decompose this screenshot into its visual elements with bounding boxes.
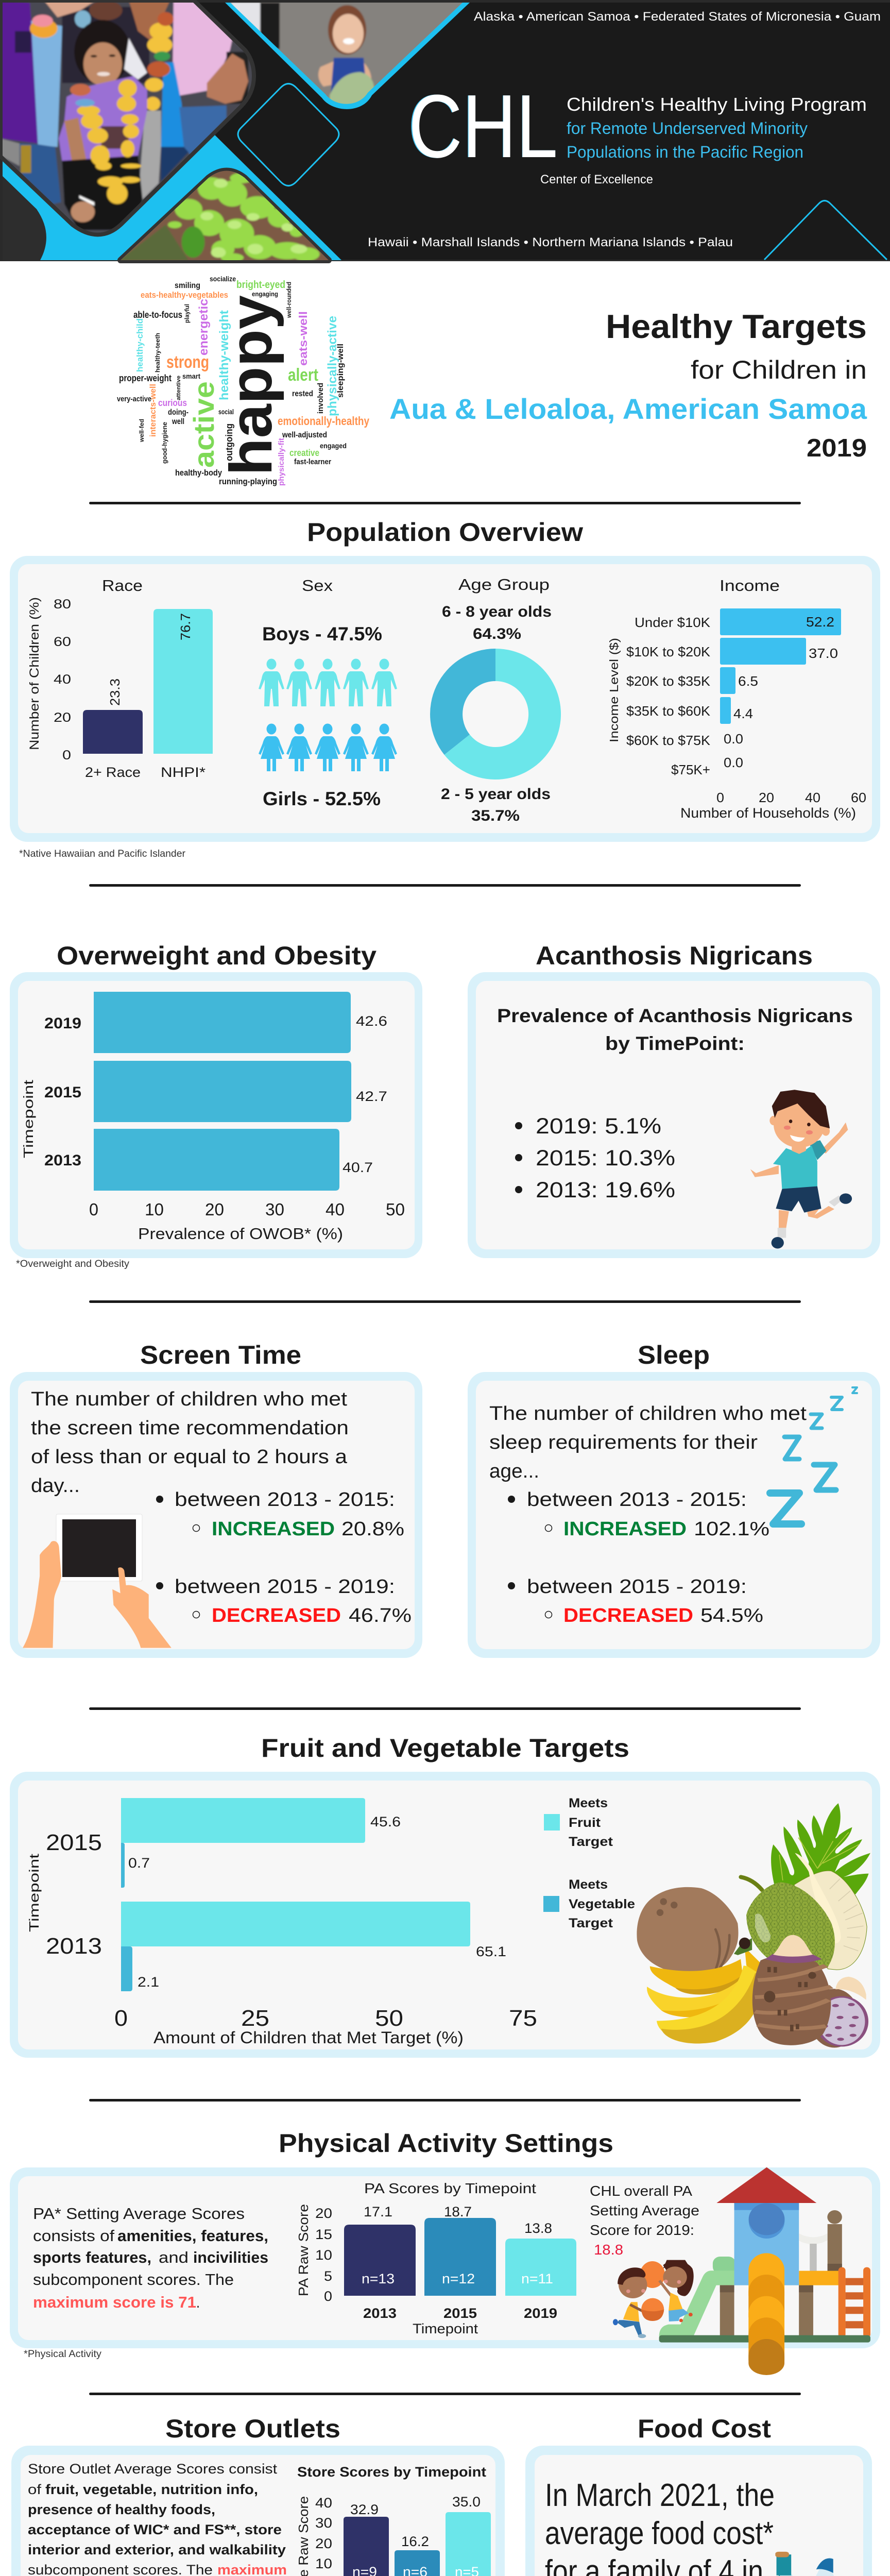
- callout: CHL overall PA score: Score for 2019:: [590, 2222, 694, 2238]
- word cloud: socialize: [210, 275, 236, 283]
- icon: running boy: [750, 1090, 852, 1248]
- heading: physical activity settings: Physical Activity Settings: [279, 2129, 613, 2158]
- chart: income: 20: [759, 790, 774, 805]
- store description text: [28, 2461, 287, 2576]
- bar chart: OWOB prevalence: 10: [145, 1200, 164, 1219]
- bar chart: fruit and vegetable: 25: [241, 2006, 269, 2031]
- bar chart: OWOB prevalence: 2019: [44, 1015, 81, 1032]
- chart: income: $75K+: [671, 762, 710, 777]
- PA description text: subcomponent scores. The: [33, 2270, 234, 2289]
- PA description text: [33, 2205, 268, 2311]
- sleep intro text: [489, 1403, 807, 1482]
- bar chart: PA scores by timepoint: 2013: [363, 2306, 397, 2321]
- legend: Meets: [569, 1796, 608, 1810]
- panel: food cost: [525, 2446, 883, 2576]
- word cloud: rested: [292, 389, 313, 398]
- bar chart: PA scores by timepoint: n=13: [362, 2271, 395, 2286]
- bar chart: OWOB prevalence: 2015: [44, 1084, 81, 1101]
- program name: Populations in the Pacific Region: [567, 143, 803, 161]
- PA description text: incivilities: [193, 2248, 268, 2266]
- panel: fruit and vegetable targets: [10, 1772, 880, 2058]
- chart: income: Income Level ($): [607, 638, 621, 742]
- chart: race: NHPI*: [161, 765, 206, 780]
- bar chart: store scores by timepoint: 32.9: [350, 2502, 379, 2517]
- heading: store outlets: Store Outlets: [165, 2414, 340, 2443]
- word cloud: well-rounded: [285, 282, 293, 318]
- bar chart: OWOB prevalence: 20: [205, 1200, 224, 1219]
- chart: race: Race: [102, 577, 143, 595]
- chart: income: Number of Households (%): [680, 805, 856, 821]
- bar chart: PA scores by timepoint: PA Scores by Timepoint: [364, 2180, 536, 2196]
- icon: hands holding tablet: [23, 1514, 172, 1648]
- sleep change list: [508, 1489, 769, 1626]
- panel: acanthosis nigricans: [468, 972, 880, 1258]
- heading: fruit and vegetable targets: Fruit and Vegetable Targets: [261, 1734, 629, 1762]
- legend: Target: [569, 1916, 613, 1930]
- chart: race: 80: [54, 597, 71, 612]
- bar chart: store scores by timepoint: 10: [315, 2556, 332, 2571]
- chart: race: 76.7: [178, 613, 193, 640]
- heading: sleep: Sleep: [638, 1341, 710, 1369]
- program name: [540, 94, 867, 187]
- footnote: NHPI: *Native Hawaiian and Pacific Islander: [19, 849, 186, 859]
- bar chart: fruit and vegetable: 75: [509, 2006, 537, 2031]
- word cloud: [117, 275, 369, 486]
- bar chart: OWOB prevalence: 40.7: [343, 1160, 373, 1175]
- sleep intro text: sleep requirements for their: [489, 1432, 758, 1453]
- legend: Target: [569, 1835, 613, 1849]
- word cloud: good-hygiene: [161, 422, 168, 464]
- chart: age group: [430, 575, 561, 824]
- word cloud: creative: [289, 448, 319, 458]
- sleep change list: DECREASED: [563, 1605, 693, 1626]
- territories bottom line: Hawaii • Marshall Islands • Northern Mariana Islands • Palau: [368, 235, 733, 249]
- bar chart: store scores by timepoint: 35.0: [452, 2494, 481, 2510]
- chart: sex: Boys - 47.5%: [262, 623, 382, 645]
- chart: race: 0: [62, 748, 71, 762]
- word cloud: physically-active: [326, 316, 339, 416]
- heading: overweight and obesity: Overweight and Obesity: [57, 941, 376, 970]
- program name: Children's Healthy Living Program: [567, 94, 867, 115]
- icon: tropical foods: [637, 1803, 870, 2047]
- main title: Healthy Targets: [606, 308, 867, 345]
- bar chart: PA scores by timepoint: 2015: [443, 2306, 477, 2321]
- word cloud: bright-eyed: [236, 279, 285, 291]
- word cloud: emotionally-healthy: [278, 414, 369, 428]
- heading: acanthosis nigricans: Acanthosis Nigricans: [536, 941, 813, 970]
- cyan shape behind photos: [3, 135, 341, 260]
- chart: age group: 2 - 5 year olds: [441, 786, 551, 803]
- sleep change list: INCREASED: [563, 1518, 687, 1540]
- main title: [389, 308, 867, 462]
- photo: girl with leis: [0, 0, 258, 242]
- chart: income: 60: [851, 790, 866, 805]
- word cloud: energetic: [197, 299, 211, 355]
- chart: income: $20K to $35K: [626, 673, 711, 689]
- food cost text: In March 2021, the: [545, 2478, 775, 2513]
- word cloud: proper-weight: [119, 373, 172, 383]
- acanthosis list: 2015: 10.3%: [536, 1146, 675, 1171]
- bar chart: fruit and vegetable: Amount of Children that Met Target (%): [153, 2028, 464, 2047]
- screen time intro text: [31, 1388, 349, 1497]
- bar chart: fruit and vegetable: 2015: [46, 1830, 102, 1855]
- PA description text: sports features,: [33, 2248, 151, 2266]
- chart: income: Under $10K: [635, 615, 711, 630]
- sleep intro text: The number of children who met: [489, 1403, 807, 1425]
- heading: screen time: Screen Time: [140, 1341, 301, 1369]
- acanthosis list: 2013: 19.6%: [536, 1178, 675, 1202]
- bar chart: store scores by timepoint: 16.2: [401, 2534, 429, 2549]
- chart: sex: Girls - 52.5%: [263, 788, 381, 809]
- heading: food cost: Food Cost: [638, 2414, 771, 2443]
- store description text: acceptance of WIC* and FS**, store: [28, 2522, 282, 2537]
- chart: race: 60: [54, 635, 71, 649]
- program name: for Remote Underserved Minority: [567, 119, 808, 138]
- food cost text: [544, 2478, 775, 2576]
- bar chart: PA scores by timepoint: 2019: [524, 2306, 557, 2321]
- chart: age group: 64.3%: [473, 625, 521, 642]
- chart: race: 2+ Race: [85, 765, 141, 780]
- word cloud: smart: [182, 372, 200, 380]
- word cloud: able-to-focus: [133, 310, 182, 320]
- bar chart: fruit and vegetable: 2013: [46, 1934, 102, 1959]
- bar chart: store scores by timepoint: 40: [315, 2495, 332, 2511]
- chart: income: 0: [716, 790, 724, 805]
- legend: Fruit: [569, 1816, 601, 1830]
- word cloud: smiling: [175, 281, 200, 290]
- panel: sleep: [468, 1372, 880, 1658]
- bar chart: store scores by timepoint: 20: [315, 2536, 332, 2551]
- word cloud: attentive: [176, 376, 182, 400]
- program name: Center of Excellence: [540, 173, 653, 187]
- bar chart: PA scores by timepoint: 13.8: [524, 2221, 552, 2236]
- word cloud: engaged: [320, 442, 347, 450]
- bar chart: OWOB prevalence: 42.7: [356, 1089, 387, 1104]
- chart: income: 0.0: [724, 755, 743, 770]
- word cloud: playful: [183, 304, 191, 323]
- word cloud: strong: [166, 352, 209, 372]
- bar chart: fruit and vegetable: 0: [114, 2006, 128, 2031]
- chart: income: Income: [720, 577, 780, 595]
- decorative diamond outline: [238, 83, 339, 185]
- panel: population overview: [10, 556, 880, 842]
- bar chart: store scores by timepoint: 30: [315, 2515, 332, 2531]
- bar chart: OWOB prevalence: 42.6: [356, 1013, 387, 1029]
- store description text: fruit, vegetable, nutrition info,: [45, 2482, 258, 2497]
- chart: race: Number of Children (%): [27, 597, 42, 750]
- chart: income: [607, 577, 866, 821]
- PA description text: and: [159, 2248, 189, 2266]
- chart: race: [27, 577, 213, 780]
- bar chart: PA scores by timepoint: 10: [315, 2247, 332, 2263]
- screen time change list: between 2013 - 2015:: [175, 1489, 395, 1511]
- PA description text: PA* Setting Average Scores: [33, 2205, 245, 2223]
- word cloud: eats-healthy-vegetables: [141, 290, 228, 300]
- word cloud: alert: [288, 365, 318, 385]
- acanthosis heading: [497, 1005, 853, 1054]
- sleep change list: 102.1%: [694, 1518, 769, 1540]
- chart: sex: Sex: [302, 577, 333, 595]
- legend: Vegetable: [569, 1897, 635, 1911]
- chart: income: 4.4: [733, 706, 753, 721]
- word cloud: happy: [217, 295, 284, 476]
- photo: lettuce field: [117, 168, 332, 263]
- chart: race: 20: [54, 710, 71, 725]
- callout: CHL overall PA score: [590, 2183, 699, 2258]
- bar chart: OWOB prevalence: Timepoint: [21, 1079, 36, 1158]
- bar chart: OWOB prevalence: 40: [326, 1200, 345, 1219]
- word cloud: active: [187, 381, 220, 468]
- photo: toddler holding bag of greens: [225, 0, 470, 113]
- callout: CHL overall PA score: Setting Average: [590, 2202, 699, 2218]
- screen time change list: between 2015 - 2019:: [175, 1576, 395, 1598]
- panel: physical activity settings: [10, 2167, 880, 2348]
- icon: playground with children: [613, 2167, 870, 2375]
- dark corner blob: [3, 176, 46, 260]
- panel: overweight and obesity: [10, 972, 422, 1258]
- main title: 2019: [807, 434, 867, 462]
- screen time change list: INCREASED: [212, 1518, 335, 1540]
- word cloud: healthy-body: [175, 468, 222, 478]
- screen time intro text: The number of children who met: [31, 1388, 347, 1410]
- chart: age group: Age Group: [458, 575, 550, 594]
- bar chart: fruit and vegetable: 0.7: [128, 1855, 150, 1871]
- screen time change list: 46.7%: [349, 1605, 412, 1626]
- bar chart: fruit and vegetable: 65.1: [476, 1944, 506, 1959]
- word cloud: healthy-weight: [217, 310, 231, 400]
- sleep intro text: age...: [489, 1461, 539, 1482]
- bar chart: OWOB prevalence: 0: [89, 1200, 98, 1219]
- bar chart: PA scores by timepoint: 0: [324, 2289, 332, 2304]
- PA description text: .: [196, 2293, 200, 2311]
- bar chart: OWOB prevalence: Prevalence of OWOB* (%): [138, 1225, 343, 1243]
- word cloud: well-adjusted: [282, 431, 327, 439]
- chart: income: 6.5: [738, 673, 758, 689]
- bar chart: PA scores by timepoint: n=11: [521, 2271, 553, 2286]
- CHL logotype: CHL: [407, 76, 558, 176]
- sleep change list: between 2015 - 2019:: [527, 1576, 747, 1598]
- panel: screen time: [10, 1372, 422, 1658]
- chart: race: 23.3: [107, 679, 123, 706]
- bar chart: PA scores by timepoint: 17.1: [364, 2204, 392, 2219]
- bar chart: PA scores by timepoint: Timepoint: [413, 2321, 478, 2336]
- bar chart: PA scores by timepoint: 18.7: [444, 2204, 472, 2219]
- word cloud: sleeping-well: [336, 344, 345, 398]
- sleep change list: between 2013 - 2015:: [527, 1489, 747, 1511]
- bar chart: fruit and vegetable: 45.6: [370, 1814, 401, 1829]
- word cloud: physically-fit: [277, 438, 286, 486]
- bar chart: PA scores by timepoint: [296, 2180, 576, 2336]
- legend: Meets: [569, 1877, 608, 1892]
- icon: sleeping Z letters: [770, 1387, 857, 1524]
- chart: income: 40: [805, 790, 820, 805]
- bar chart: fruit and vegetable: Timepoint: [26, 1853, 42, 1932]
- screen time intro text: day...: [31, 1475, 80, 1497]
- main title: for Children in: [691, 355, 867, 384]
- bar chart: OWOB prevalence: 30: [265, 1200, 284, 1219]
- bar chart: OWOB prevalence: 50: [386, 1200, 405, 1219]
- chart: income: $35K to $60K: [626, 703, 711, 719]
- chart: race: 40: [54, 672, 71, 687]
- PA description text: maximum score is 71: [33, 2293, 196, 2311]
- bar chart: fruit and vegetable: 50: [375, 2006, 403, 2031]
- food cost text: average food cost*: [545, 2516, 774, 2551]
- panel: store outlets: [11, 2446, 505, 2576]
- word cloud: healthy-child: [135, 318, 145, 372]
- main title: Aua & Leloaloa, American Samoa: [389, 393, 867, 425]
- bar chart: PA scores by timepoint: 20: [315, 2206, 332, 2221]
- word cloud: engaging: [252, 290, 278, 298]
- word cloud: involved: [316, 383, 325, 414]
- heading: population overview: Population Overview: [307, 518, 583, 547]
- word cloud: social: [218, 408, 234, 416]
- acanthosis list: 2019: 5.1%: [536, 1114, 661, 1139]
- chart: age group: 6 - 8 year olds: [442, 603, 552, 620]
- store description text: Store Outlet Average Scores consist: [28, 2461, 278, 2477]
- chart: income: $60K to $75K: [626, 733, 711, 748]
- decorative triangle outline: [764, 201, 887, 260]
- word cloud: doing-: [168, 408, 189, 417]
- store description text: of: [28, 2482, 42, 2497]
- acanthosis heading: Prevalence of Acanthosis Nigricans: [497, 1005, 853, 1026]
- header banner: [0, 0, 890, 268]
- bar chart: PA scores by timepoint: PA Raw Score: [296, 2204, 311, 2296]
- word cloud: eats-well: [297, 311, 310, 366]
- acanthosis list: [515, 1114, 675, 1202]
- word cloud: very-active: [117, 395, 151, 403]
- chart: income: 52.2: [806, 614, 834, 630]
- word cloud: well-fed: [138, 419, 145, 443]
- store description text: presence of healthy foods,: [28, 2502, 215, 2517]
- icon: grocery bag: [741, 2552, 883, 2576]
- screen time change list: DECREASED: [212, 1605, 341, 1626]
- PA description text: consists of: [33, 2227, 114, 2245]
- screen time intro text: of less than or equal to 2 hours a: [31, 1446, 348, 1468]
- bar chart: PA scores by timepoint: 15: [315, 2227, 332, 2242]
- legend: [543, 1796, 635, 1930]
- bar chart: OWOB prevalence: 2013: [44, 1152, 81, 1169]
- word cloud: running-playing: [219, 477, 277, 486]
- store description text: interior and exterior, and walkability: [28, 2542, 286, 2557]
- screen time change list: 20.8%: [341, 1518, 404, 1540]
- word cloud: interacts-well: [149, 384, 158, 437]
- screen time change list: [156, 1489, 412, 1626]
- chart: income: 0.0: [724, 731, 743, 747]
- sleep change list: 54.5%: [700, 1605, 763, 1626]
- PA description text: amenities, features,: [117, 2227, 268, 2245]
- chart: age group: 35.7%: [471, 807, 520, 824]
- bar chart: PA scores by timepoint: n=12: [442, 2271, 475, 2286]
- footnote: physical activity: *Physical Activity: [24, 2349, 102, 2360]
- word cloud: healthy-teeth: [154, 333, 161, 372]
- callout: CHL overall PA score: 18.8: [594, 2242, 623, 2258]
- word cloud: curious: [158, 398, 187, 408]
- bar chart: store scores by timepoint: [296, 2464, 491, 2576]
- chart: income: 37.0: [809, 646, 838, 661]
- bar chart: PA scores by timepoint: 5: [324, 2268, 332, 2284]
- bar chart: OWOB prevalence: [21, 992, 405, 1243]
- chart: income: $10K to $20K: [626, 644, 711, 659]
- word cloud: outgoing: [224, 423, 234, 461]
- bar chart: fruit and vegetable: [26, 1798, 537, 2047]
- word cloud: well: [172, 417, 184, 426]
- footnote: OWOB: *Overweight and Obesity: [16, 1259, 130, 1269]
- word cloud: fast-learner: [294, 457, 331, 466]
- bar chart: fruit and vegetable: 2.1: [138, 1974, 159, 1990]
- bar chart: store scores by timepoint: Store Scores by Timepoint: [297, 2464, 486, 2480]
- chart: sex: [259, 577, 397, 809]
- CHL logotype: CHL: [408, 76, 558, 176]
- callout: CHL overall PA score: CHL overall PA: [590, 2183, 692, 2199]
- territories top line: Alaska • American Samoa • Federated States of Micronesia • Guam: [474, 10, 881, 24]
- acanthosis heading: by TimePoint:: [605, 1033, 745, 1054]
- screen time intro text: the screen time recommendation: [31, 1417, 349, 1439]
